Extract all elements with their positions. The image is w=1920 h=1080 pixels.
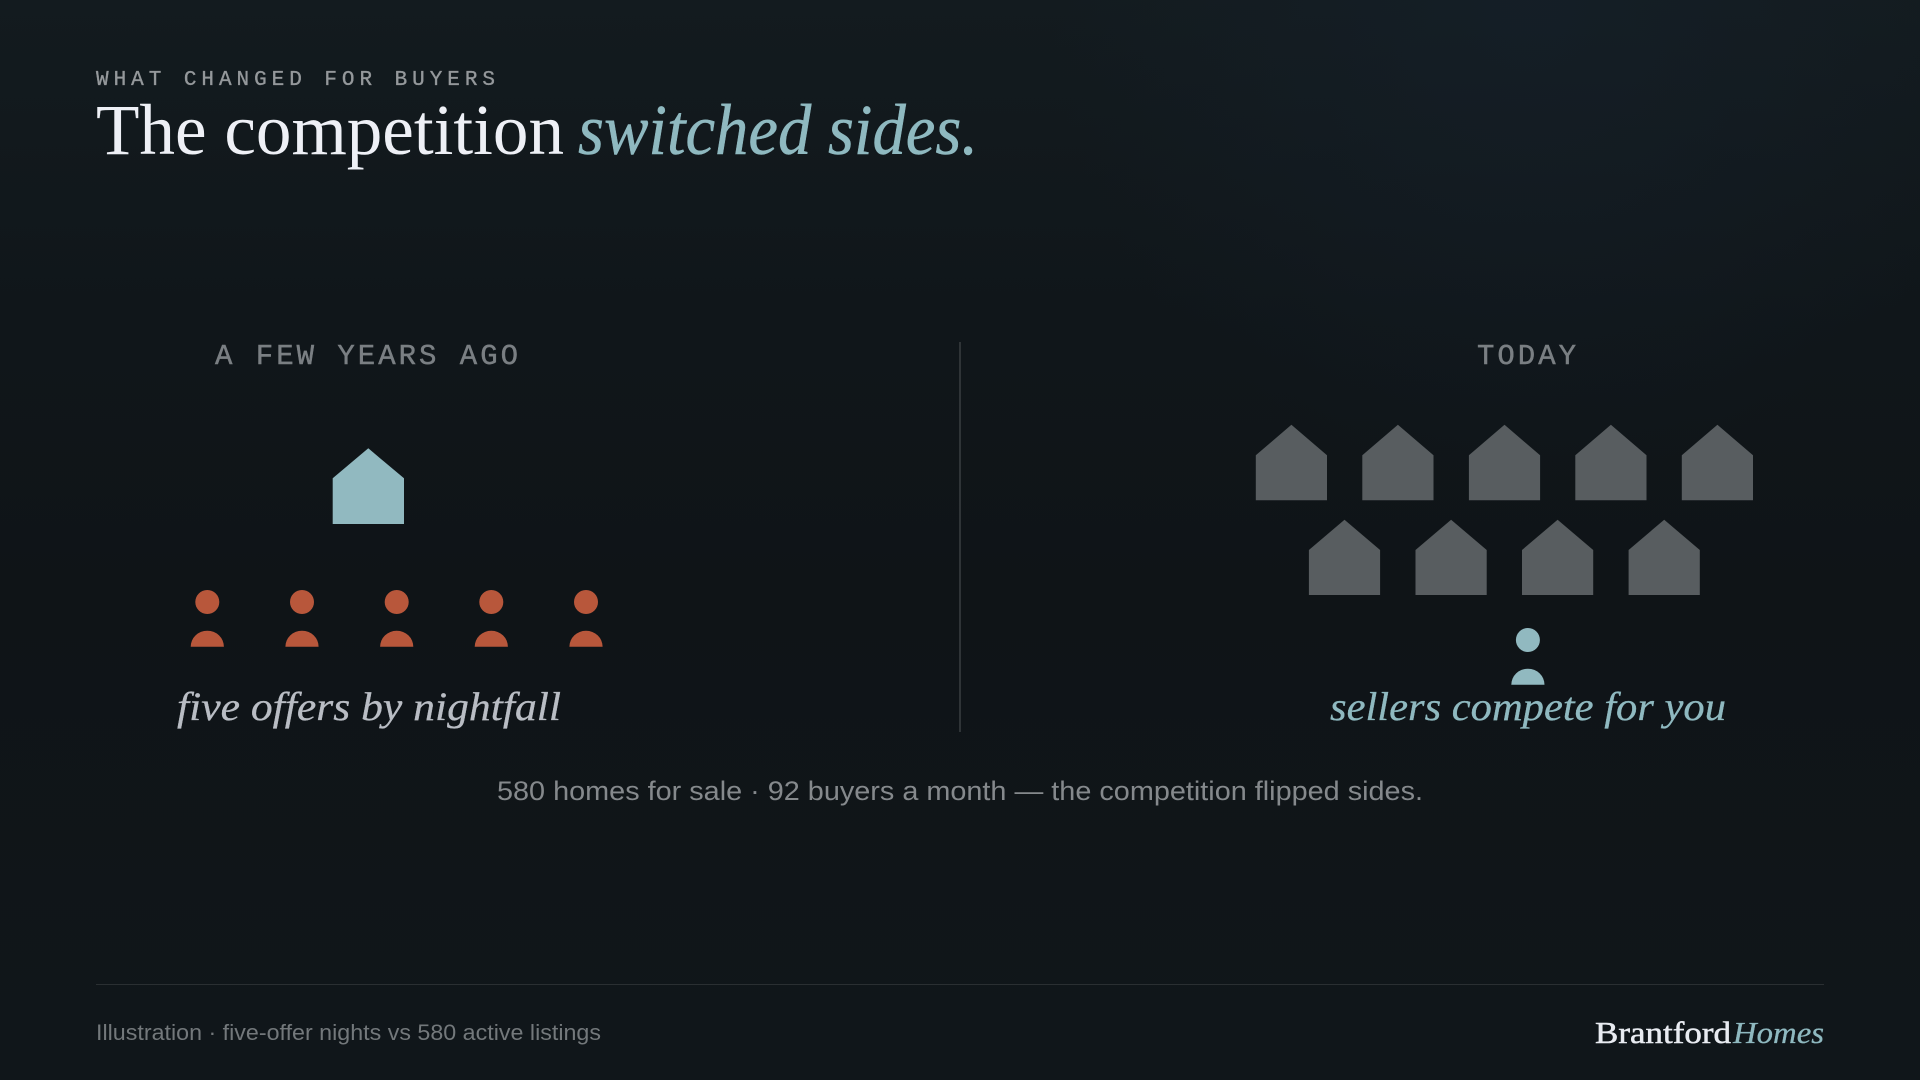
summary line: 580 homes for sale · 92 buyers a month — the competition flipped sides. <box>497 776 1423 806</box>
brand wordmark: Brantford <box>1595 1015 1732 1050</box>
brand wordmark <box>1595 1015 1824 1050</box>
icon: single house <box>333 448 404 524</box>
title <box>96 90 978 170</box>
icons: five competing buyers <box>191 590 603 647</box>
panel: a few years ago <box>177 340 603 729</box>
icon: single buyer <box>1511 628 1544 685</box>
eyebrow: WHAT CHANGED FOR BUYERS <box>96 69 495 92</box>
panel: today <box>1256 340 1753 729</box>
panel heading: a few years ago: A FEW YEARS AGO <box>215 340 518 373</box>
title: The competition <box>96 90 564 170</box>
footer rule <box>96 984 1824 985</box>
footer source note: Illustration · five-offer nights vs 580 active listings <box>96 1020 601 1045</box>
brand wordmark: Homes <box>1732 1015 1824 1050</box>
caption: five offers: five offers by nightfall <box>177 684 561 729</box>
divider between panels <box>959 342 961 732</box>
caption: sellers compete: sellers compete for you <box>1330 684 1726 729</box>
panel heading: today: TODAY <box>1477 340 1576 373</box>
title: switched sides. <box>578 90 978 170</box>
icons: nine houses for sale <box>1256 425 1753 595</box>
